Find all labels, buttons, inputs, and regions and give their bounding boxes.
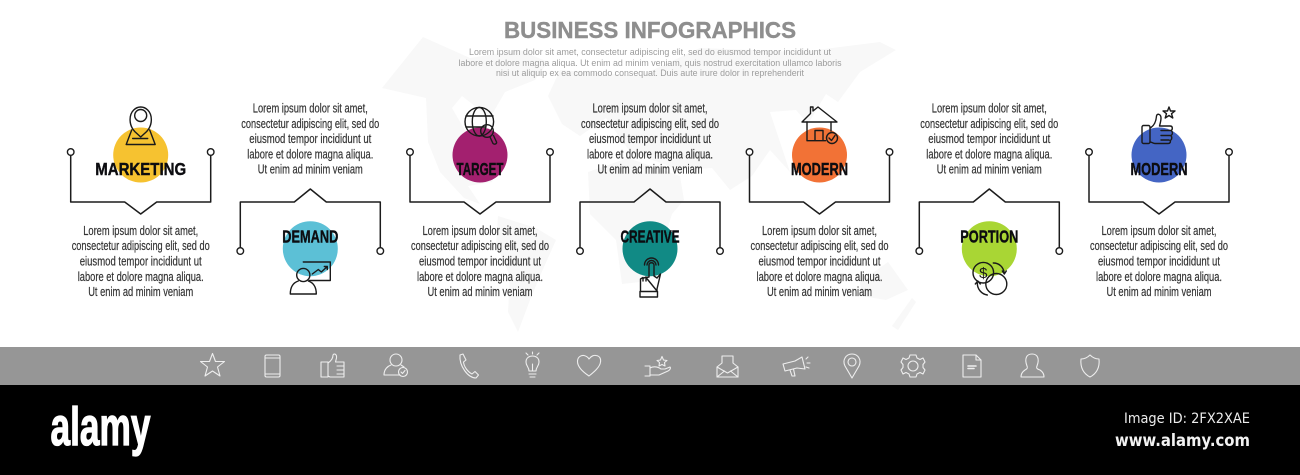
icon: heart	[578, 355, 601, 376]
marketing label: MARKETING	[95, 159, 186, 179]
icon: hand with star	[645, 356, 670, 376]
icon: smartphone	[265, 355, 280, 377]
modern label: MODERN	[791, 159, 848, 179]
logo: alamy	[50, 397, 150, 457]
target text: Lorem ipsum dolor sit amet,	[422, 224, 538, 238]
marketing text: Lorem ipsum dolor sit amet,	[83, 224, 198, 238]
icon: map pin	[126, 107, 155, 144]
modern second text: consectetur adipiscing elit, sed do	[1090, 239, 1228, 253]
icon: megaphone	[783, 357, 810, 376]
creative text: labore et dolore magna aliqua.	[587, 148, 713, 162]
demand circle	[283, 221, 338, 276]
icon: globe with magnifier	[465, 107, 497, 144]
panel: marketing	[67, 107, 214, 299]
portion text	[920, 102, 1058, 176]
icon: document	[963, 355, 981, 377]
icon: pointing hand	[640, 258, 660, 297]
target circle	[452, 128, 508, 182]
icon: thumbs up with star	[1142, 107, 1175, 144]
icon: location pin	[844, 354, 860, 378]
creative bracket	[577, 189, 723, 254]
modern circle	[792, 128, 847, 182]
modern bracket	[746, 149, 893, 214]
demand text: eiusmod tempor incididunt ut	[249, 132, 372, 146]
icon: house with check	[802, 107, 838, 144]
creative circle	[622, 221, 678, 276]
marketing text: eiusmod tempor incididunt ut	[80, 254, 202, 268]
modern second text: Ut enim ad minim veniam	[1106, 285, 1212, 299]
creative text: Lorem ipsum dolor sit amet,	[592, 102, 708, 116]
modern second bracket	[1086, 149, 1232, 214]
demand text	[241, 102, 379, 176]
marketing text	[72, 224, 210, 299]
icon: shield	[1081, 355, 1099, 377]
creative text: consectetur adipiscing elit, sed do	[581, 117, 719, 131]
marketing text: Ut enim ad minim veniam	[88, 285, 193, 299]
background world map	[382, 37, 916, 332]
icon: person	[1021, 354, 1044, 377]
subtitle text: nisi ut aliquip ex ea commodo consequat. Duis aute irure dolor in reprehenderit	[496, 68, 804, 79]
panel: target	[407, 107, 553, 299]
title: BUSINESS INFOGRAPHICS	[504, 17, 796, 43]
portion text: eiusmod tempor incididunt ut	[928, 132, 1051, 146]
portion label: PORTION	[960, 226, 1018, 246]
portion text: consectetur adipiscing elit, sed do	[920, 117, 1058, 131]
demand text: Lorem ipsum dolor sit amet,	[253, 102, 368, 116]
target text	[411, 224, 549, 299]
target text: consectetur adipiscing elit, sed do	[411, 239, 549, 253]
icon: coins exchange	[973, 262, 1007, 295]
icon: telephone	[460, 354, 478, 378]
icon: presenter with chart	[290, 262, 330, 294]
modern second circle	[1132, 128, 1186, 182]
icon: gear	[901, 355, 925, 377]
icon: user check	[384, 354, 408, 376]
modern text: eiusmod tempor incididunt ut	[758, 254, 881, 268]
icon: envelope	[717, 356, 738, 377]
icon: coins exchange: $	[979, 265, 988, 282]
modern text: labore et dolore magna aliqua.	[756, 270, 883, 284]
modern second text: eiusmod tempor incididunt ut	[1098, 254, 1220, 268]
modern text	[750, 224, 889, 299]
panel: demand	[237, 102, 384, 294]
demand bracket	[237, 189, 384, 254]
subtitle text: Lorem ipsum dolor sit amet, consectetur adipiscing elit, sed do eiusmod tempor incididunt ut	[469, 47, 831, 58]
portion text: Lorem ipsum dolor sit amet,	[932, 102, 1047, 116]
marketing text: labore et dolore magna aliqua.	[78, 270, 204, 284]
portion circle	[962, 221, 1017, 276]
creative text: eiusmod tempor incididunt ut	[589, 132, 711, 146]
modern second text: labore et dolore magna aliqua.	[1096, 270, 1222, 284]
creative label: CREATIVE	[620, 226, 680, 246]
marketing circle	[113, 128, 168, 182]
demand label: DEMAND	[282, 226, 338, 246]
modern second text: Lorem ipsum dolor sit amet,	[1102, 224, 1216, 238]
icon strip	[0, 347, 1300, 385]
footer bar	[0, 385, 1300, 475]
marketing bracket	[67, 149, 214, 214]
modern text: Ut enim ad minim veniam	[767, 285, 872, 299]
demand text: labore et dolore magna aliqua.	[247, 148, 373, 162]
demand text: Ut enim ad minim veniam	[258, 162, 363, 176]
panel: portion	[916, 102, 1063, 295]
target text: eiusmod tempor incididunt ut	[419, 254, 541, 268]
marketing text: consectetur adipiscing elit, sed do	[72, 239, 210, 253]
subtitle text	[458, 47, 842, 79]
subtitle text: labore et dolore magna aliqua. Ut enim ad minim veniam, quis nostrud exercitation ullamco laboris	[458, 58, 842, 69]
target text: labore et dolore magna aliqua.	[417, 270, 543, 284]
image id: Image ID: 2FX2XAE	[1124, 411, 1250, 427]
portion bracket	[916, 189, 1063, 254]
target label: TARGET	[457, 159, 504, 179]
icon: light bulb	[526, 352, 539, 377]
modern text: consectetur adipiscing elit, sed do	[750, 239, 889, 253]
panel: modern	[746, 107, 893, 299]
target bracket	[407, 149, 553, 214]
target text: Ut enim ad minim veniam	[428, 285, 532, 299]
creative text	[581, 102, 719, 176]
icon: thumb up	[321, 354, 344, 377]
icon: star	[200, 354, 224, 376]
panel: modern second	[1086, 107, 1232, 299]
website: www.alamy.com	[1115, 431, 1250, 450]
demand text: consectetur adipiscing elit, sed do	[241, 117, 379, 131]
modern second text	[1090, 224, 1228, 299]
panel: creative	[577, 102, 723, 297]
portion text: labore et dolore magna aliqua.	[926, 148, 1052, 162]
creative text: Ut enim ad minim veniam	[598, 162, 702, 176]
portion text: Ut enim ad minim veniam	[937, 162, 1042, 176]
modern text: Lorem ipsum dolor sit amet,	[762, 224, 877, 238]
modern second label: MODERN	[1130, 159, 1188, 179]
